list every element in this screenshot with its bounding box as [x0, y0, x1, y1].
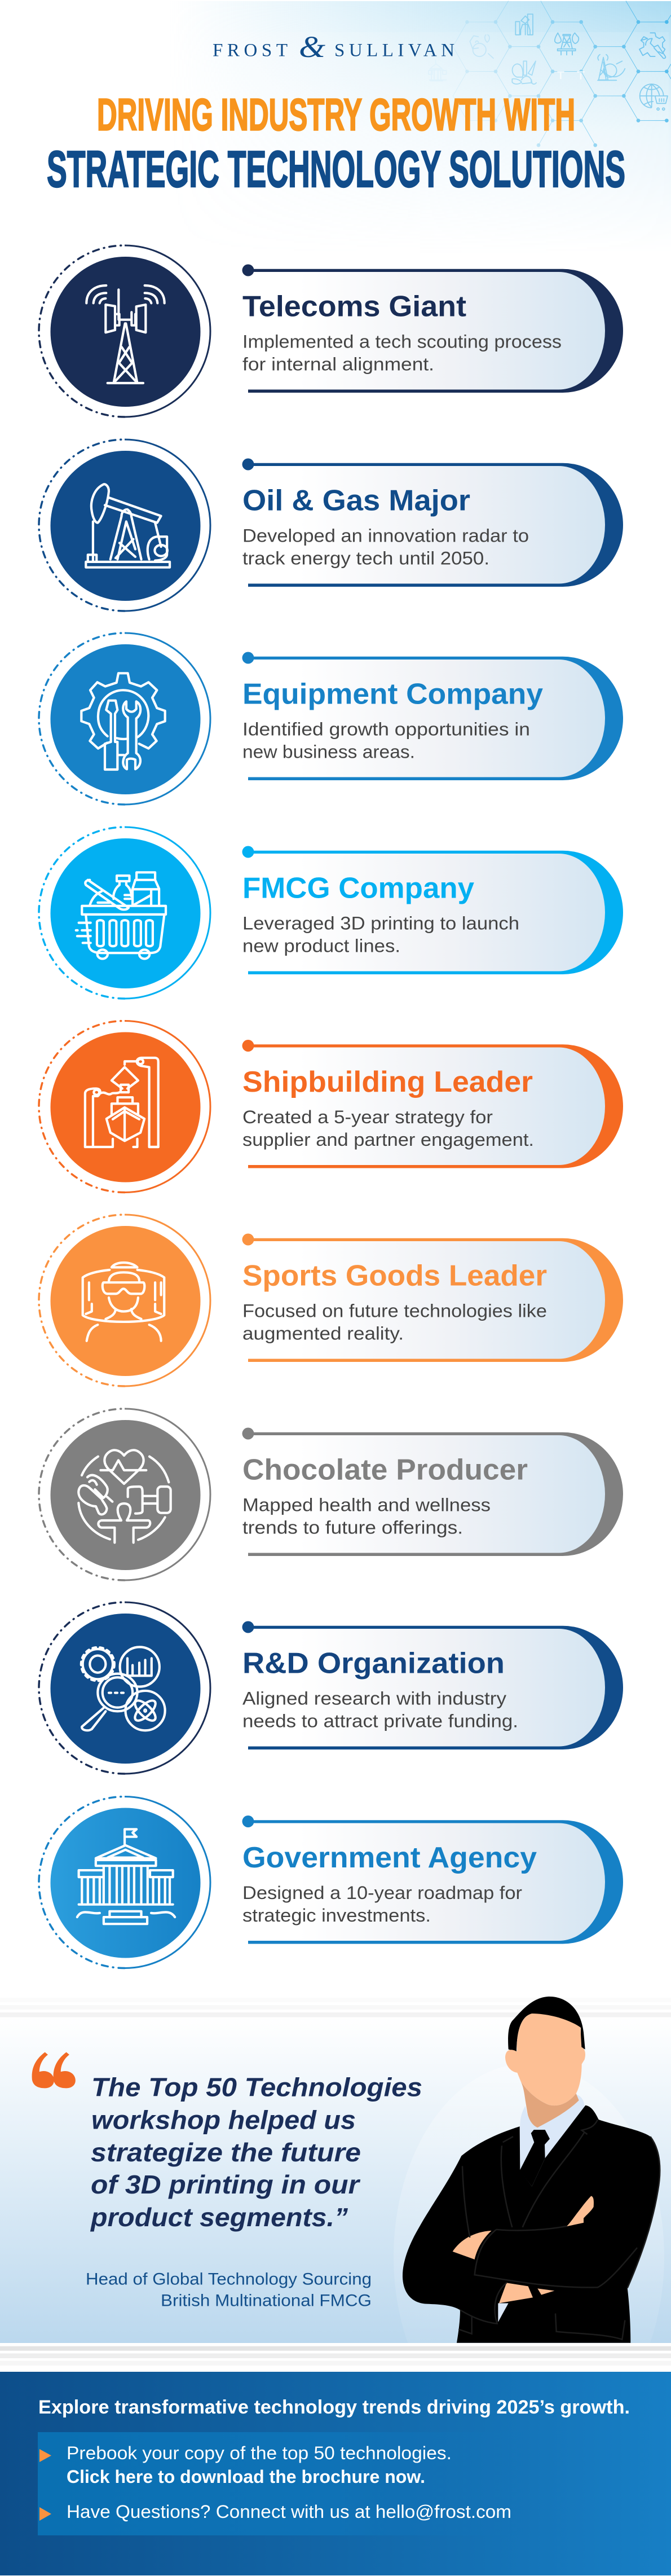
- description: Mapped health and wellness: [242, 1494, 491, 1515]
- quote text: of 3D printing in our: [91, 2170, 360, 2199]
- attribution: British Multinational FMCG: [161, 2292, 372, 2310]
- icon: augmented reality headset: [83, 1263, 164, 1341]
- footer heading: Explore transformative technology trends driving 2025’s growth.: [38, 2397, 630, 2418]
- quote text: strategize the future: [91, 2138, 361, 2167]
- heading: Sports Goods Leader: [242, 1260, 547, 1293]
- icon: shopping basket: [76, 872, 166, 959]
- description: [242, 331, 562, 375]
- hexagon technology network: [429, 1, 671, 147]
- heading: Equipment Company: [242, 678, 543, 711]
- panel: R&D Organization: [39, 1602, 623, 1774]
- attribution: [86, 2270, 372, 2310]
- description: supplier and partner engagement.: [242, 1129, 534, 1150]
- icon: gear with tools: [81, 673, 165, 770]
- description: Identified growth opportunities in: [242, 719, 530, 739]
- description: Aligned research with industry: [242, 1688, 506, 1708]
- panel: Government Agency: [39, 1796, 623, 1968]
- panel: FMCG Company: [39, 827, 623, 999]
- description: [242, 1107, 534, 1150]
- icon: government building: [77, 1829, 175, 1924]
- description: new business areas.: [242, 742, 415, 762]
- panel: Sports Goods Leader: [39, 1215, 623, 1386]
- description: augmented reality.: [242, 1324, 404, 1344]
- panel: Chocolate Producer: [39, 1409, 623, 1580]
- description: Implemented a tech scouting process: [242, 331, 562, 351]
- panel: Telecoms Giant: [39, 245, 623, 417]
- description: [242, 1688, 518, 1731]
- attribution: Head of Global Technology Sourcing: [86, 2270, 372, 2288]
- description: [242, 1300, 547, 1344]
- panel: Shipbuilding Leader: [39, 1021, 623, 1193]
- call to action: contact: Have Questions? Connect with us at hello@frost.com: [67, 2502, 511, 2522]
- description: [242, 1883, 522, 1926]
- description: Designed a 10-year roadmap for: [242, 1883, 522, 1903]
- logo: Frost & Sullivan: [213, 30, 454, 64]
- description: for internal alignment.: [242, 354, 434, 375]
- call to action: brochure: Click here to download the brochure now.: [67, 2467, 425, 2487]
- logo: Frost & Sullivan: FROST: [213, 41, 288, 61]
- description: strategic investments.: [242, 1905, 431, 1926]
- heading: FMCG Company: [242, 872, 474, 905]
- description: track energy tech until 2050.: [242, 548, 489, 569]
- icon: orange arrow: [39, 2449, 51, 2462]
- description: trends to future offerings.: [242, 1518, 463, 1538]
- description: Focused on future technologies like: [242, 1300, 547, 1321]
- heading: Government Agency: [242, 1841, 537, 1874]
- call to action: brochure: [67, 2443, 452, 2487]
- description: Developed an innovation radar to: [242, 525, 529, 546]
- description: [242, 719, 530, 762]
- panel: testimonial: [0, 1997, 671, 2450]
- quote text: The Top 50 Technologies: [91, 2073, 422, 2102]
- heading: Telecoms Giant: [242, 291, 466, 323]
- description: needs to attract private funding.: [242, 1711, 518, 1731]
- description: [242, 525, 529, 569]
- icon: telecom tower: [86, 285, 165, 383]
- icon: shipyard crane and ship: [85, 1058, 158, 1147]
- quote text: workshop helped us: [91, 2105, 356, 2135]
- icon: quotation mark: [32, 2052, 76, 2088]
- illustration: businessman with folded arms: [403, 1997, 660, 2343]
- quote text: [90, 2073, 422, 2232]
- call to action: brochure: Prebook your copy of the top 50 technologies.: [67, 2443, 452, 2463]
- panel: Oil & Gas Major: [39, 439, 623, 611]
- description: Created a 5-year strategy for: [242, 1107, 493, 1127]
- icon: oil pump: [86, 484, 170, 568]
- panel: footer call to action: [0, 2372, 671, 2575]
- icon: research magnifier, gear and atom: [81, 1647, 165, 1730]
- description: [242, 1494, 491, 1538]
- divider stripes: [0, 2346, 671, 2366]
- heading: Chocolate Producer: [242, 1454, 528, 1487]
- description: Leveraged 3D printing to launch: [242, 913, 519, 933]
- title: [47, 89, 625, 198]
- heading: Oil & Gas Major: [242, 485, 470, 517]
- icon: health and wellness: [78, 1450, 171, 1542]
- heading: R&D Organization: [242, 1647, 505, 1680]
- heading: Shipbuilding Leader: [242, 1066, 533, 1098]
- description: new product lines.: [242, 936, 400, 956]
- icon: orange arrow: [39, 2507, 51, 2521]
- header background: [215, 1, 671, 207]
- panel: Equipment Company: [39, 633, 623, 805]
- description: [242, 913, 519, 956]
- logo: Frost & Sullivan: &: [299, 30, 325, 64]
- logo: Frost & Sullivan: SULLIVAN: [334, 41, 454, 61]
- quote text: product segments.”: [90, 2203, 348, 2232]
